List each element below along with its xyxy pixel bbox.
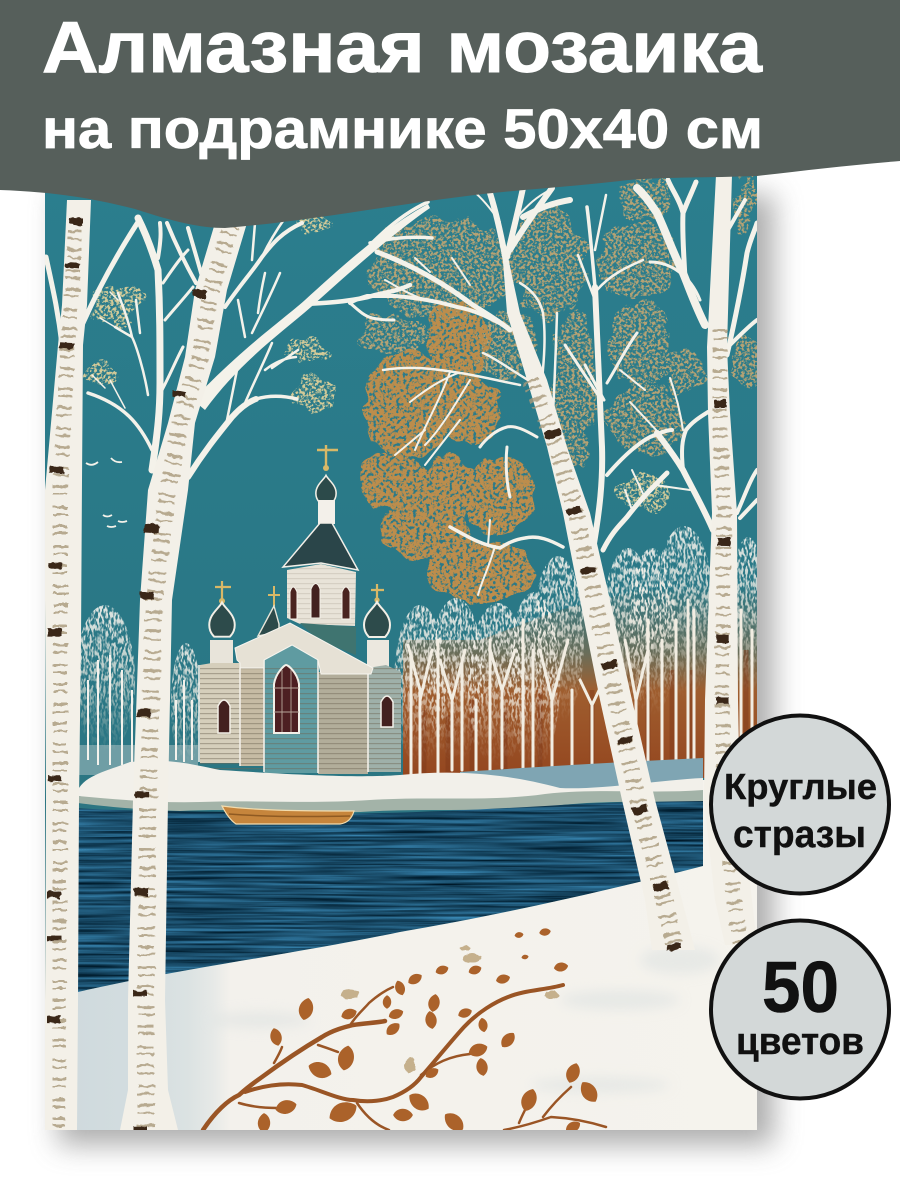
top banner [0, 0, 900, 228]
title line 2: на подрамнике 50х40 см [42, 97, 763, 160]
church [199, 445, 401, 774]
church walls [199, 645, 401, 774]
birch trunk centre left [120, 223, 247, 1130]
tower roof [283, 523, 358, 570]
sky background [45, 170, 757, 1030]
left window [218, 700, 230, 733]
badge: 50 colours [711, 920, 889, 1098]
canvas drop shadow [58, 195, 774, 1145]
distant forest left [75, 605, 201, 775]
badge caption: цветов [736, 1021, 864, 1063]
leaf branches [203, 1021, 385, 1130]
tower body with windows [287, 564, 356, 655]
central arched window [274, 665, 299, 733]
painting: winter church and birches [45, 170, 766, 1135]
pale tufts on left trees [82, 211, 666, 512]
snow smears [210, 946, 720, 1093]
birch trunk far right [704, 175, 757, 945]
right turret [364, 584, 390, 668]
window mullions [274, 670, 299, 732]
dark stripes [424, 650, 746, 775]
rust undergrowth [403, 585, 757, 778]
white forest trunks [408, 600, 752, 775]
badge: round rhinestones [711, 716, 889, 894]
white tree branches left group [46, 204, 430, 477]
birds [86, 458, 127, 527]
distant forest right [394, 526, 766, 778]
gold foliage dense crown [360, 302, 536, 602]
fallen leaf trail [203, 927, 606, 1135]
left forest trunks [88, 655, 192, 765]
badge text line 2: стразы [733, 814, 866, 856]
forest crowns [394, 526, 766, 768]
badge number: 50 [762, 948, 839, 1028]
snow bank [78, 758, 703, 812]
right window [381, 696, 393, 727]
thin mid birch [592, 287, 602, 555]
main upward limb [193, 204, 430, 410]
left forest crowns [75, 605, 201, 767]
foreground snow [45, 780, 757, 1130]
river [74, 801, 703, 993]
birch trunk far left [45, 200, 91, 1130]
main dome with cross [316, 445, 338, 524]
small rear dome [258, 586, 280, 636]
badge text line 1: Круглые [724, 766, 877, 807]
title [42, 8, 763, 160]
pale leaf smudges [341, 945, 558, 1074]
title line 1: Алмазная мозаика [42, 8, 763, 88]
church gable roof [235, 623, 373, 674]
gold foliage upper canopy [358, 176, 762, 466]
birch trunk centre right [503, 262, 695, 950]
rowing boat [222, 806, 354, 824]
white tree branches right group [350, 180, 757, 595]
left turret [209, 581, 235, 665]
